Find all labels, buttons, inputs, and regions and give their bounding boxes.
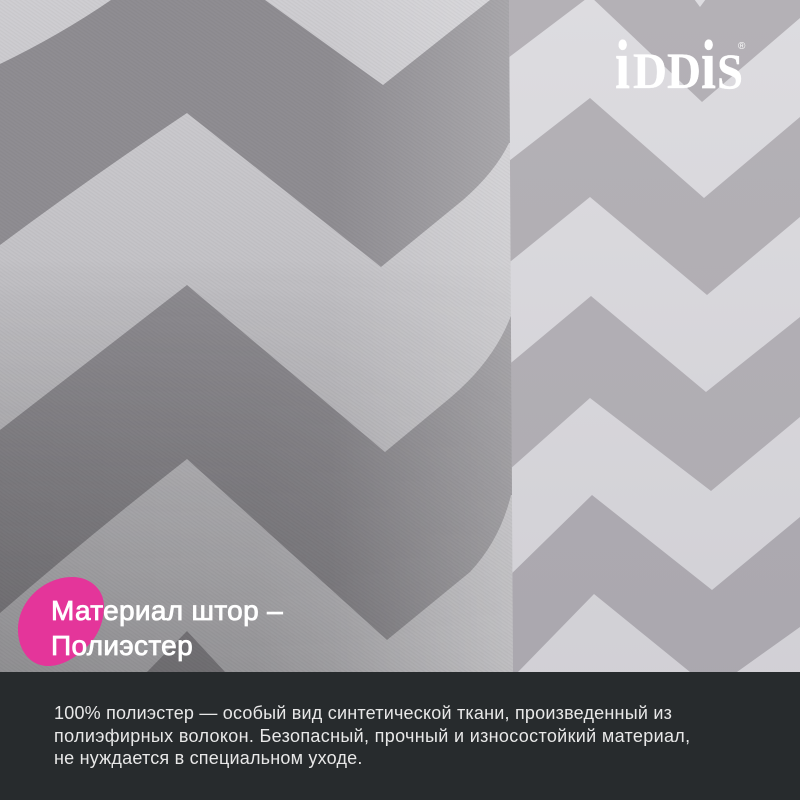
left curtain panel with large chevrons — [0, 0, 520, 672]
description text: не нуждается в специальном уходе. — [54, 748, 363, 768]
title: Материал штор – — [51, 595, 283, 626]
logo: i — [701, 27, 716, 104]
right curtain panel with chevrons — [500, 0, 800, 672]
logo: D — [633, 44, 667, 100]
logo: D — [667, 44, 701, 100]
description text: полиэфирных волокон. Безопасный, прочный и износостойкий материал, — [54, 726, 690, 746]
title — [51, 595, 284, 662]
logo: S — [717, 43, 743, 99]
logo: ® — [738, 41, 746, 52]
logo: i — [615, 27, 630, 104]
title: Полиэстер — [51, 630, 193, 661]
description text — [54, 703, 690, 768]
description text: 100% полиэстер — особый вид синтетической ткани, произведенный из — [54, 703, 672, 723]
description panel — [0, 672, 800, 800]
